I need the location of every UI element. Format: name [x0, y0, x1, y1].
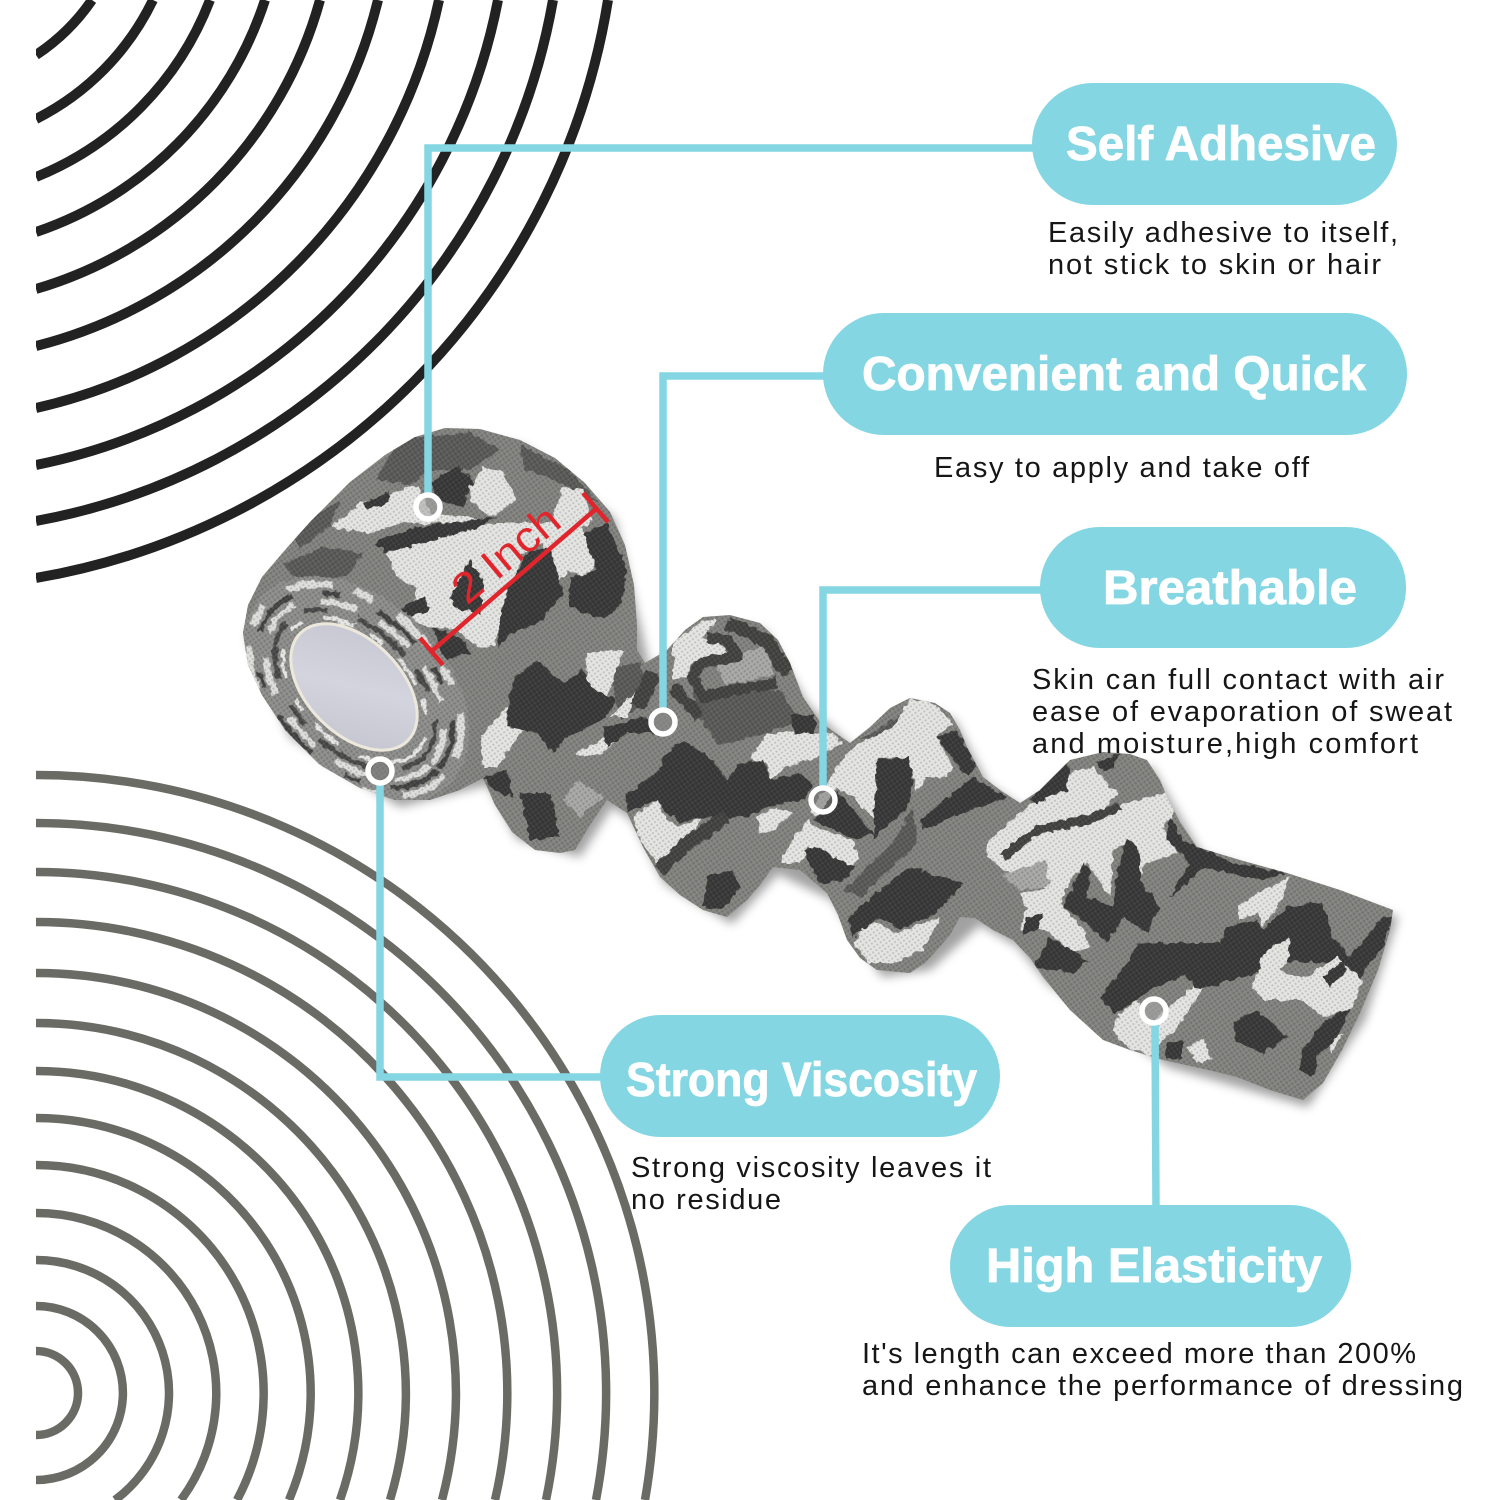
dark patches	[363, 467, 1393, 1077]
dimension label: 2 Inch	[443, 496, 570, 614]
heading: Breathable	[1103, 562, 1357, 615]
2 inch dimension marker	[420, 493, 608, 665]
small dark detail	[1323, 960, 1347, 987]
feature: strong viscosity	[600, 1015, 1000, 1216]
description: and moisture,high comfort	[1032, 728, 1418, 760]
description: Easy to apply and take off	[934, 452, 1310, 484]
roll end face with wound layers	[243, 575, 470, 800]
tape weave texture	[230, 420, 1410, 1120]
pill	[823, 313, 1407, 435]
white patches	[330, 467, 1343, 1063]
pill	[600, 1015, 1000, 1137]
tape camouflage body	[197, 420, 1410, 1120]
grey concentric arcs, bottom left	[36, 775, 654, 1500]
dimension line	[420, 493, 608, 665]
description: It's length can exceed more than 200%	[862, 1338, 1416, 1370]
tape shadow	[248, 435, 1398, 1107]
connector: strong viscosity	[368, 759, 605, 1077]
connector: breathable	[811, 590, 1045, 812]
pill	[1032, 83, 1397, 205]
description: no residue	[631, 1184, 781, 1216]
description: and enhance the performance of dressing	[862, 1370, 1463, 1402]
description: Strong viscosity leaves it	[631, 1152, 991, 1184]
camouflage tape roll and unrolled strip	[197, 420, 1410, 1120]
heading: Self Adhesive	[1066, 118, 1376, 171]
shaded grey patches	[283, 432, 917, 897]
pill	[1040, 527, 1406, 648]
description: Skin can full contact with air	[1032, 664, 1444, 696]
description: ease of evaporation of sweat	[1032, 696, 1452, 728]
light fold patches	[563, 645, 1050, 890]
feature: high elasticity	[862, 1205, 1463, 1402]
white patches over dark	[1253, 937, 1363, 1017]
description: Easily adhesive to itself,	[1048, 217, 1398, 249]
heading: Convenient and Quick	[862, 348, 1366, 401]
connector: self adhesive	[416, 148, 1040, 519]
roll core hole	[267, 600, 441, 774]
heading: Strong Viscosity	[626, 1054, 977, 1107]
description: not stick to skin or hair	[1048, 249, 1381, 281]
connector: convenient and quick	[651, 376, 830, 734]
black concentric arcs, top left	[36, 0, 608, 578]
heading: High Elasticity	[986, 1240, 1322, 1293]
dark branch strokes	[637, 623, 1120, 870]
pill	[950, 1205, 1351, 1327]
feature: breathable	[1032, 527, 1452, 760]
feature: self adhesive	[1032, 83, 1398, 281]
connector: high elasticity	[1142, 999, 1166, 1210]
feature: convenient and quick	[823, 313, 1407, 484]
